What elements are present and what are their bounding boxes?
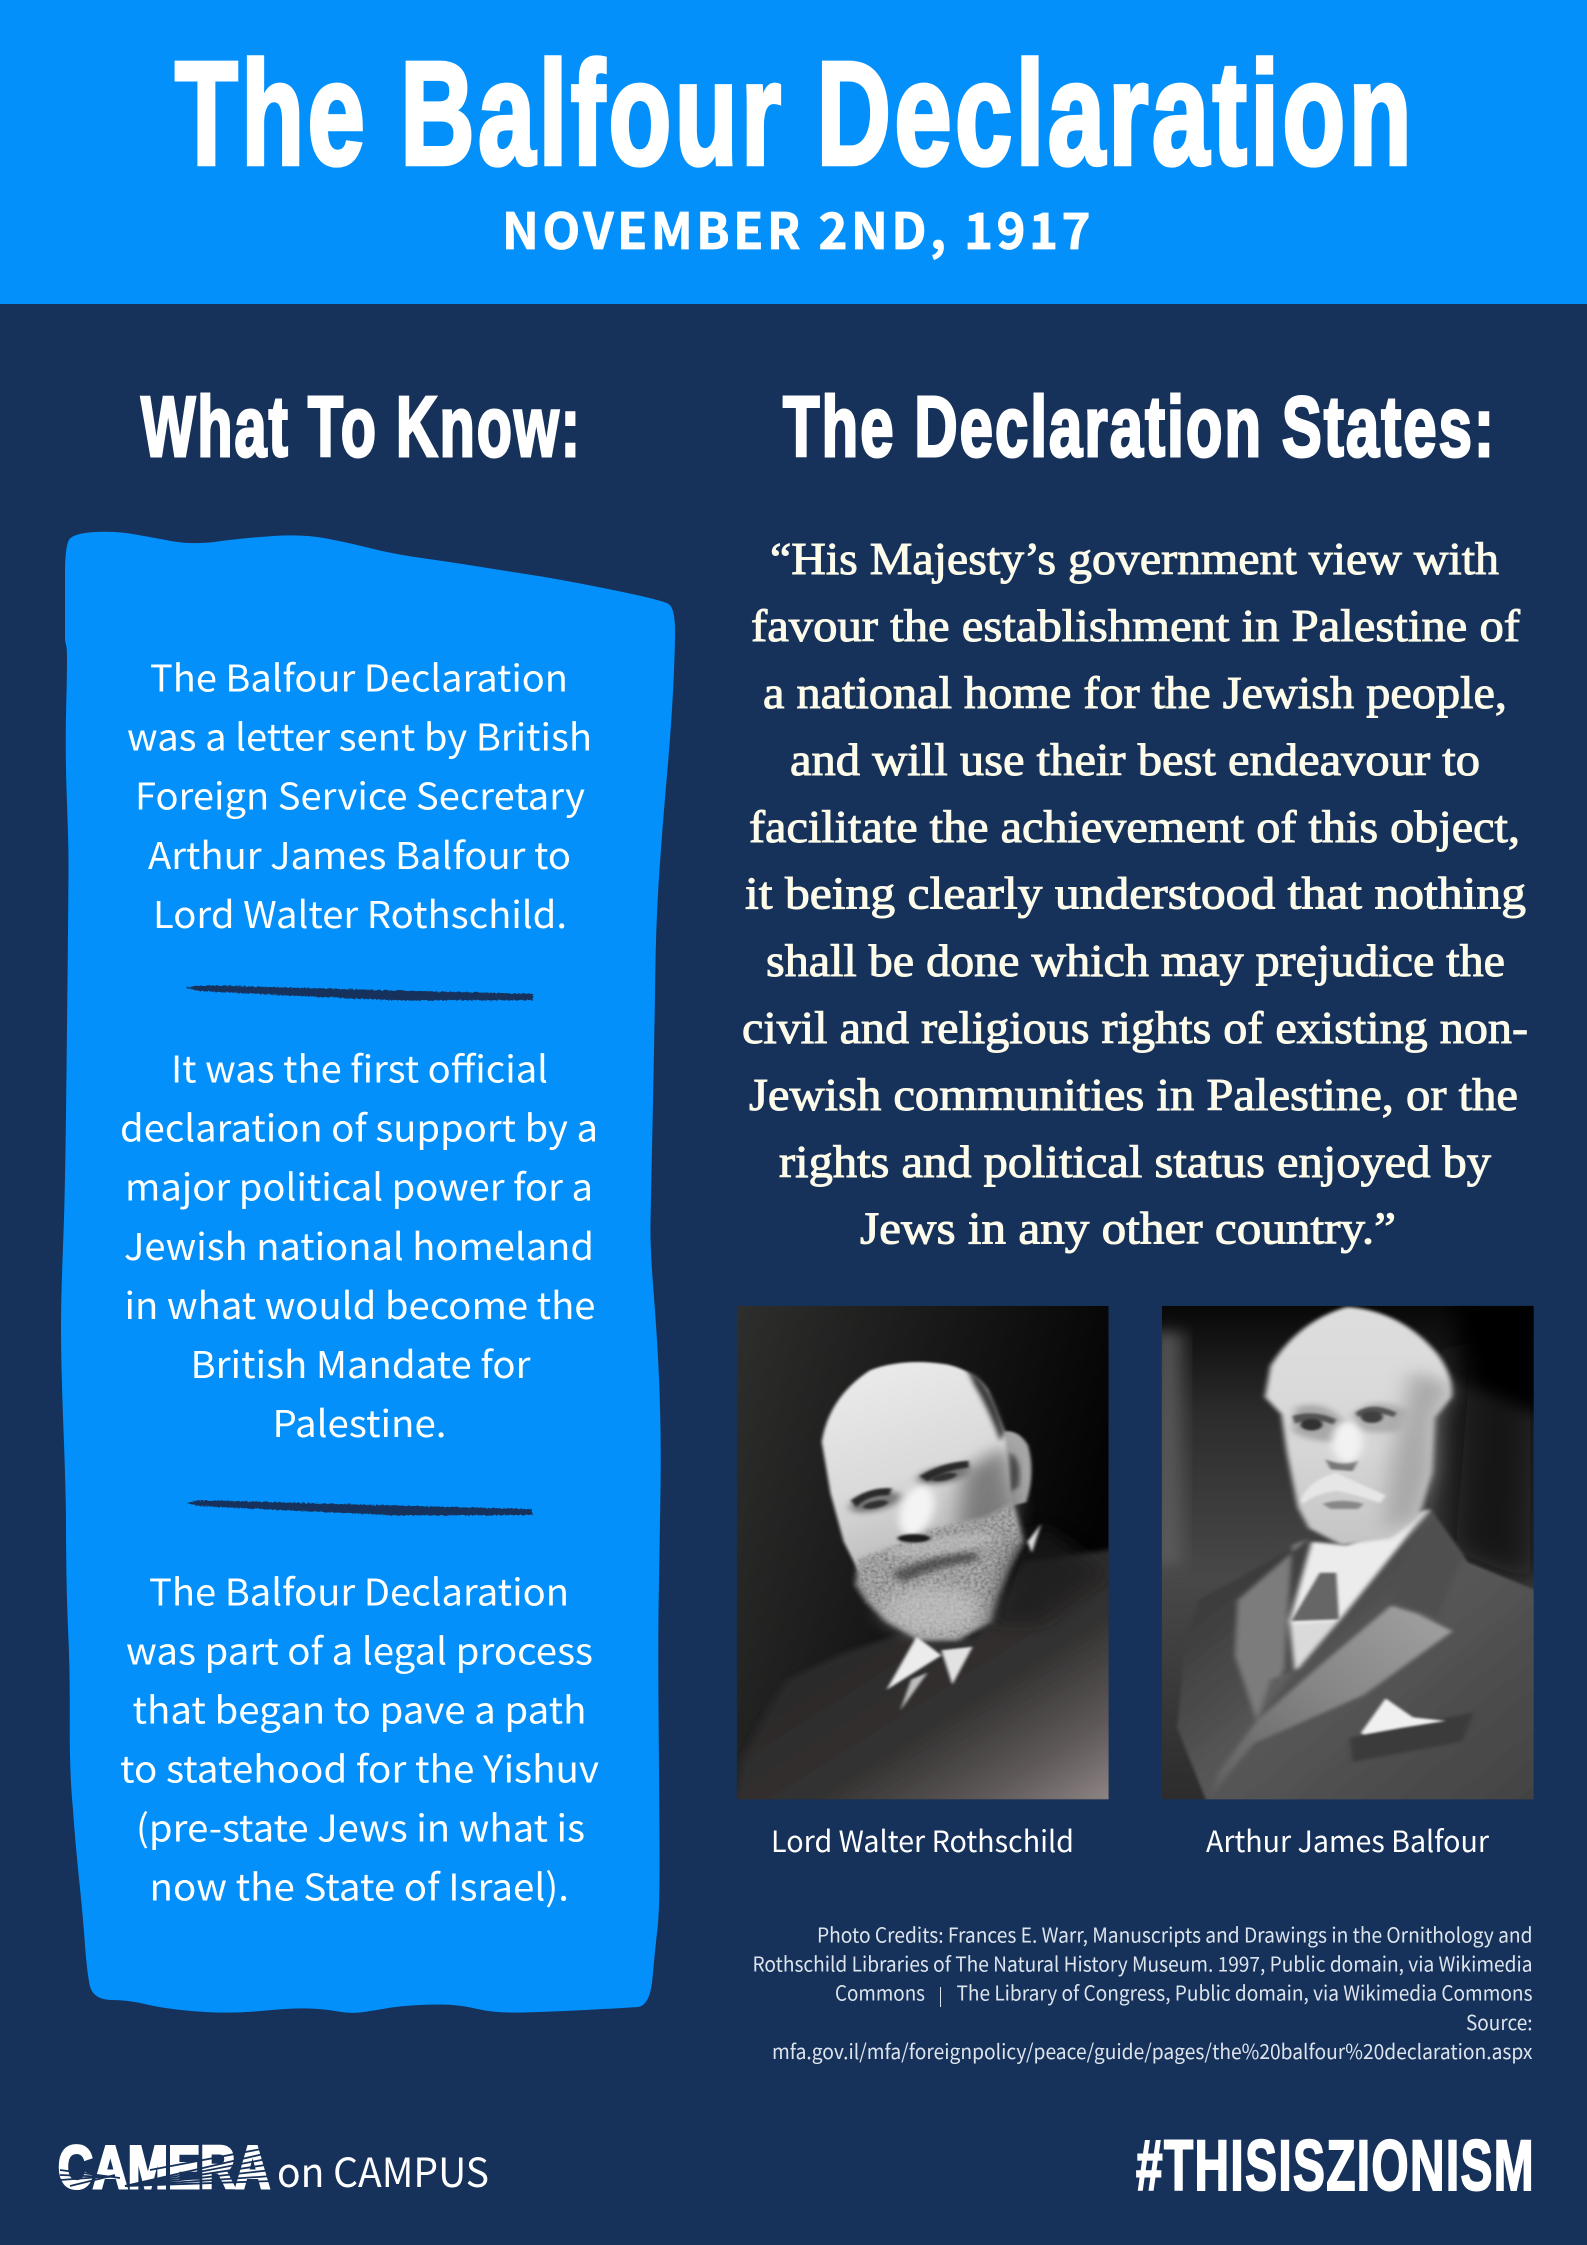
photo credits and source: Commons	[835, 1976, 925, 2006]
paragraph 1: Arthur James Balfour to	[148, 826, 571, 880]
subtitle: date: NOVEMBER 2ND, 1917	[502, 192, 1094, 264]
logo: CAMERA on CAMPUS	[58, 2134, 489, 2201]
quote: declaration text: Jews in any other country.”	[860, 1202, 1396, 1254]
divider 1	[186, 985, 533, 1000]
paragraph 2	[120, 1040, 598, 1448]
photo credits and source: Photo Credits: Frances E. Warr, Manuscripts and Drawings in the Ornithology and	[817, 1918, 1532, 1948]
header banner	[0, 0, 1587, 304]
paragraph 3: that began to pave a path	[132, 1680, 586, 1734]
paragraph 1: The Balfour Declaration	[150, 648, 568, 702]
divider 2	[186, 1500, 532, 1516]
quote: declaration text	[742, 533, 1528, 1254]
paragraph 1: was a letter sent by British	[127, 708, 592, 762]
paragraph 1: Lord Walter Rothschild.	[153, 885, 567, 939]
caption: Rothschild: Lord Walter Rothschild	[771, 1819, 1074, 1861]
photo: Lord Walter Rothschild	[736, 1306, 1109, 1800]
paragraph 3: was part of a legal process	[126, 1622, 593, 1676]
quote: declaration text: it being clearly understood that nothing	[745, 868, 1526, 918]
paragraph 2: declaration of support by a	[120, 1098, 598, 1152]
photo: Arthur James Balfour	[1162, 1306, 1534, 1800]
photo credits and source	[752, 1918, 1532, 2065]
quote: declaration text: shall be done which may prejudice the	[766, 935, 1505, 986]
quote: declaration text: civil and religious rights of existing non-	[742, 1002, 1528, 1053]
photo credits and source: mfa.gov.il/mfa/foreignpolicy/peace/guide/pages/the%20balfour%20declaration.aspx	[772, 2035, 1532, 2065]
quote: declaration text: Jewish communities in Palestine, or the	[749, 1069, 1518, 1120]
quote: declaration text: favour the establishment in Palestine of	[751, 600, 1521, 651]
heading: what to know: What To Know:	[141, 380, 582, 475]
photo credits and source: The Library of Congress, Public domain, via Wikimedia Commons	[956, 1976, 1532, 2006]
paragraph 2: Jewish national homeland	[124, 1217, 594, 1271]
paragraph 2: It was the first official	[171, 1040, 548, 1094]
photo credits and source: Source:	[1466, 2006, 1532, 2036]
paragraph 1	[127, 648, 592, 939]
panel background: hand-drawn blue shape	[61, 532, 675, 2013]
quote: declaration text: and will use their best endeavour to	[790, 734, 1480, 785]
quote: declaration text: “His Majesty’s government view with	[770, 533, 1499, 584]
panel: what to know	[61, 532, 675, 2013]
paragraph 3: to statehood for the Yishuv	[120, 1740, 599, 1794]
paragraph 2: Palestine.	[272, 1394, 446, 1448]
paragraph 3: now the State of Israel).	[150, 1858, 569, 1912]
logo: CAMERA on CAMPUS: CAMERA	[58, 2134, 270, 2201]
quote: declaration text: facilitate the achievement of this object,	[749, 801, 1520, 852]
logo stripes	[60, 2147, 272, 2186]
paragraph 3	[120, 1562, 599, 1912]
photo credits and source: Rothschild Libraries of The Natural History Museum. 1997, Public domain, via Wikimedia	[752, 1948, 1532, 1978]
caption: Balfour: Arthur James Balfour	[1206, 1819, 1490, 1861]
logo: CAMERA on CAMPUS: on CAMPUS	[277, 2141, 489, 2199]
paragraph 2: in what would become the	[124, 1276, 596, 1330]
paragraph 2: British Mandate for	[190, 1335, 531, 1389]
quote: declaration text: a national home for the Jewish people,	[763, 667, 1507, 718]
paragraph 1: Foreign Service Secretary	[135, 766, 585, 820]
quote: declaration text: rights and political status enjoyed by	[779, 1136, 1491, 1187]
paragraph 3: The Balfour Declaration	[149, 1562, 569, 1616]
paragraph 3: (pre-state Jews in what is	[136, 1798, 585, 1852]
paragraph 2: major political power for a	[125, 1158, 593, 1212]
